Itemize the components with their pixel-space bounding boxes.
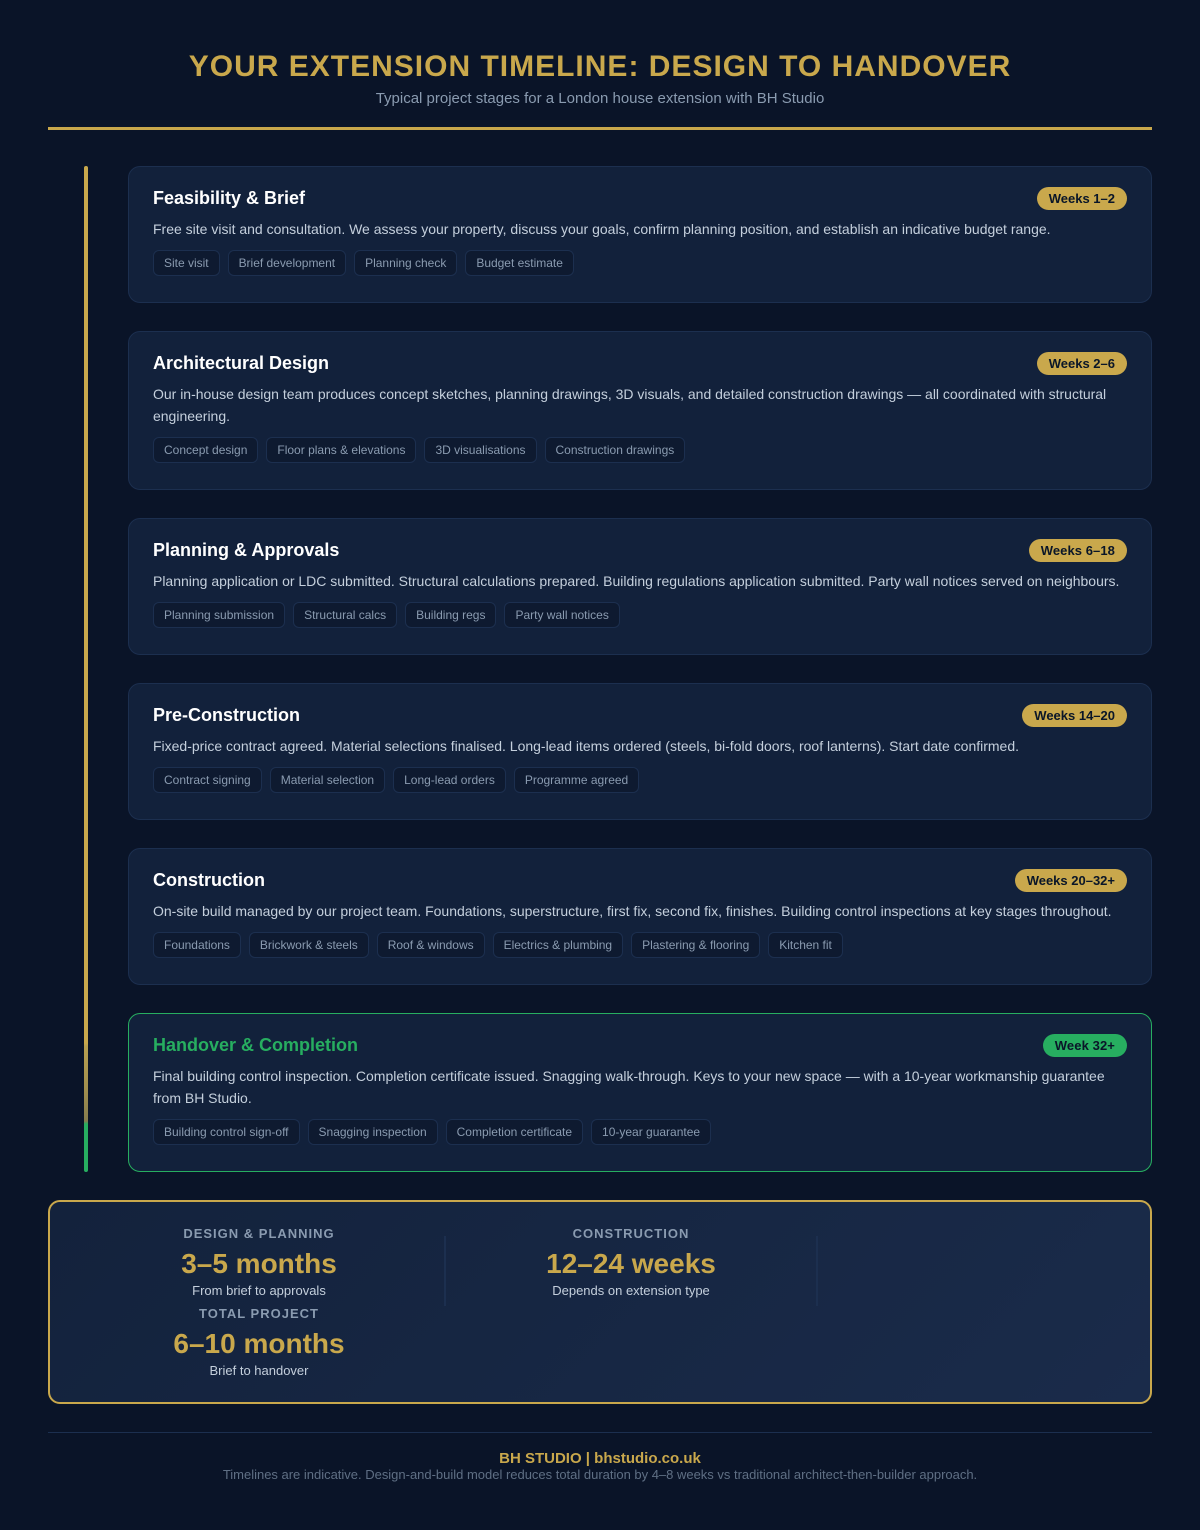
stat: total project: Brief to handover	[209, 1363, 308, 1378]
badge: weeks 14-20	[1022, 704, 1127, 727]
stat: total project: 6–10 months	[173, 1328, 345, 1359]
tags: Foundations	[164, 938, 230, 952]
panel: Planning & Approvals	[128, 518, 1152, 655]
tags: Party wall notices	[515, 608, 609, 622]
panel: Pre-Construction	[128, 683, 1152, 820]
stat: construction: CONSTRUCTION	[573, 1226, 689, 1241]
stat: construction: Depends on extension type	[552, 1283, 710, 1298]
tags: Contract signing	[164, 773, 251, 787]
heading: Feasibility & Brief	[153, 188, 305, 208]
tags: Structural calcs	[304, 608, 386, 622]
panel: Handover & Completion	[128, 1013, 1152, 1172]
description: Free site visit and consultation. We assess your property, discuss your goals, confirm planning position, and establish an indicative budget range.	[153, 221, 1051, 237]
heading: Planning & Approvals	[153, 540, 339, 560]
description: On-site build managed by our project team. Foundations, superstructure, first fix, second fix, finishes. Building control inspections at key stages throughout.	[153, 903, 1112, 919]
badge: week 32+	[1043, 1034, 1127, 1057]
stat: design & planning: From brief to approvals	[192, 1283, 326, 1298]
tags: Material selection	[281, 773, 374, 787]
description: Our in-house design team produces concept sketches, planning drawings, 3D visuals, and detailed construction drawings — all coordinated with structural engineering.	[153, 386, 1106, 424]
footer brand: BH STUDIO | bhstudio.co.uk	[499, 1450, 701, 1467]
panel: Feasibility & Brief	[128, 166, 1152, 303]
heading: Pre-Construction	[153, 705, 300, 725]
footer note: Timelines are indicative. Design-and-build model reduces total duration by 4–8 weeks vs traditional architect-then-builder approach.	[223, 1467, 977, 1482]
tags: Electrics & plumbing	[504, 938, 612, 952]
heading: Architectural Design	[153, 353, 329, 373]
tags: Roof & windows	[388, 938, 474, 952]
tags	[153, 250, 574, 276]
timeline vertical line	[84, 166, 88, 1172]
panel: Construction	[128, 848, 1152, 985]
tags: Site visit	[164, 256, 209, 270]
tags: Planning check	[365, 256, 446, 270]
stat: total project: TOTAL PROJECT	[199, 1306, 319, 1321]
heading: Handover & Completion	[153, 1035, 358, 1055]
heading: Construction	[153, 870, 265, 890]
description: Fixed-price contract agreed. Material selections finalised. Long-lead items ordered (steels, bi-fold doors, roof lanterns). Start date confirmed.	[153, 738, 1019, 754]
tags: Plastering & flooring	[642, 938, 749, 952]
stat: design & planning	[181, 1226, 337, 1298]
tags: Construction drawings	[556, 443, 674, 457]
badge: weeks 2-6: Weeks 2–6	[1049, 356, 1115, 371]
description: Final building control inspection. Completion certificate issued. Snagging walk-through. Keys to your new space — with a 10-year workmanship guarantee from BH Studio.	[153, 1068, 1105, 1106]
stat: design & planning: DESIGN & PLANNING	[183, 1226, 335, 1241]
stat: construction: 12–24 weeks	[546, 1248, 716, 1279]
tags: Snagging inspection	[319, 1125, 427, 1139]
subtitle: Typical project stages for a London house extension with BH Studio	[376, 90, 824, 107]
panel: summary stats	[48, 1200, 1152, 1404]
tags	[153, 767, 639, 793]
badge: week 32+: Week 32+	[1055, 1038, 1115, 1053]
tags	[153, 1119, 711, 1145]
tags: Building regs	[416, 608, 485, 622]
tags: Programme agreed	[525, 773, 628, 787]
description: Planning application or LDC submitted. Structural calculations prepared. Building regulations application submitted. Party wall notices served on neighbours.	[153, 573, 1119, 589]
stat: construction	[546, 1226, 716, 1298]
badge: weeks 1-2: Weeks 1–2	[1049, 191, 1115, 206]
tags: 10-year guarantee	[602, 1125, 700, 1139]
badge: weeks 6-18: Weeks 6–18	[1041, 543, 1115, 558]
tags: Floor plans & elevations	[277, 443, 405, 457]
badge: weeks 6-18	[1029, 539, 1127, 562]
badge: weeks 2-6	[1037, 352, 1127, 375]
badge: weeks 14-20: Weeks 14–20	[1034, 708, 1115, 723]
panel: Architectural Design	[128, 331, 1152, 490]
tags: Concept design	[164, 443, 247, 457]
badge: weeks 20-32+	[1015, 869, 1127, 892]
tags: Completion certificate	[457, 1125, 572, 1139]
tags: Kitchen fit	[779, 938, 832, 952]
title: YOUR EXTENSION TIMELINE: DESIGN TO HANDOVER	[189, 50, 1011, 83]
tags	[153, 437, 685, 463]
tags: Budget estimate	[476, 256, 563, 270]
tags: Planning submission	[164, 608, 274, 622]
stat: design & planning: 3–5 months	[181, 1248, 337, 1279]
tags: Long-lead orders	[404, 773, 495, 787]
badge: weeks 20-32+: Weeks 20–32+	[1027, 873, 1115, 888]
tags: 3D visualisations	[435, 443, 526, 457]
tags: Brief development	[239, 256, 335, 270]
stat: total project	[173, 1306, 345, 1378]
tags: Brickwork & steels	[260, 938, 358, 952]
tags: Building control sign-off	[164, 1125, 289, 1139]
tags	[153, 932, 843, 958]
tags	[153, 602, 620, 628]
badge: weeks 1-2	[1037, 187, 1127, 210]
